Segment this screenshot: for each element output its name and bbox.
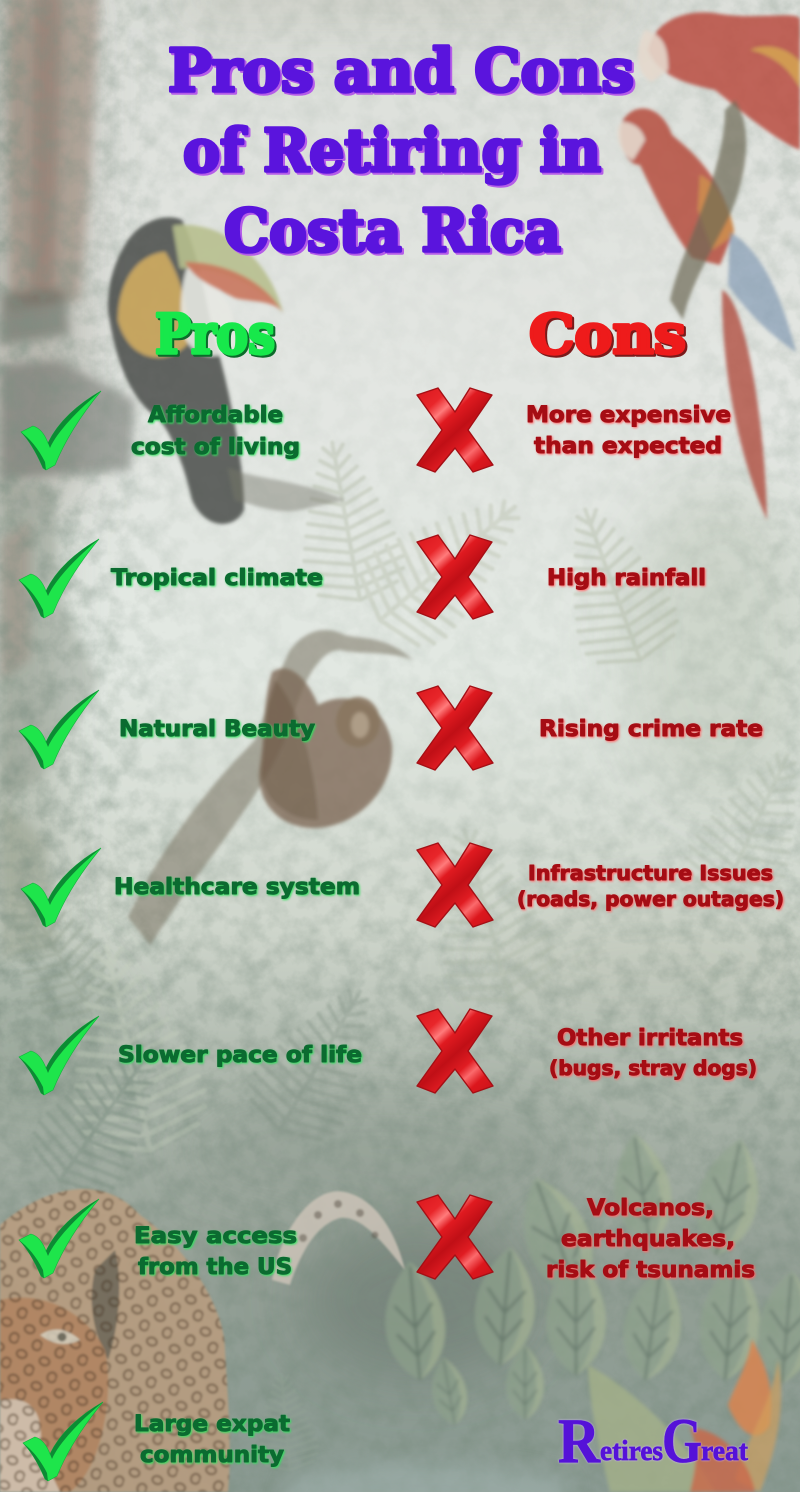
pro: natural beauty: Natural Beauty	[119, 717, 315, 742]
con: other irritants: (bugs, stray dogs)	[549, 1056, 757, 1080]
con: infrastructure issues	[517, 861, 784, 911]
con: infrastructure issues: Infrastructure Issues	[528, 861, 773, 885]
con: other irritants: Other irritants	[557, 1026, 743, 1051]
title: Pros and Cons	[168, 36, 634, 105]
background detail: jaguar	[0, 1189, 405, 1492]
logo: RetiresGreat: etires	[600, 1436, 663, 1467]
pro: large expat community	[134, 1412, 291, 1468]
con: rising crime rate: Rising crime rate	[539, 717, 763, 742]
icon: check 5	[19, 1016, 99, 1095]
pro: affordable cost of living: Affordable	[148, 403, 283, 428]
con: infrastructure issues: (roads, power outages)	[517, 887, 784, 911]
title	[168, 36, 634, 265]
pro: healthcare system: Healthcare system	[114, 875, 360, 900]
icon: cross 6	[417, 1195, 493, 1279]
icon: cross 2	[417, 535, 493, 619]
background detail: pool of water	[280, 1463, 570, 1492]
con: more expensive than expected: than expected	[534, 434, 722, 459]
con: volcanos, earthquakes, risk of tsunamis	[546, 1196, 755, 1283]
pro: tropical climate: Tropical climate	[111, 566, 323, 591]
pros list	[19, 391, 362, 1481]
icon: check 3	[19, 690, 99, 769]
cons list	[417, 388, 784, 1283]
background detail: jungle leaves lower right	[380, 1130, 800, 1428]
pro: easy access from the US: from the US	[138, 1255, 292, 1280]
title: Costa Rica	[224, 196, 561, 265]
icon: check 2	[19, 539, 99, 618]
icon: check 7	[23, 1402, 103, 1481]
con: more expensive than expected	[526, 403, 731, 459]
logo: RetiresGreat: R	[558, 1406, 601, 1476]
logo: RetiresGreat: reat	[701, 1436, 749, 1467]
icon: cross 1	[417, 388, 493, 472]
logo: RetiresGreat	[558, 1406, 749, 1476]
heading: Cons: Cons	[529, 302, 686, 366]
pro: slower pace of life: Slower pace of life	[118, 1043, 362, 1068]
title: of Retiring in	[183, 116, 601, 185]
pro: affordable cost of living	[131, 403, 300, 460]
con: volcanos, earthquakes, risk of tsunamis: risk of tsunamis	[546, 1258, 755, 1283]
pro: large expat community: Large expat	[134, 1412, 291, 1437]
icon: cross 5	[417, 1009, 493, 1093]
icon: check 1	[21, 391, 101, 470]
con: volcanos, earthquakes, risk of tsunamis: earthquakes,	[561, 1227, 735, 1252]
icon: cross 4	[417, 843, 493, 927]
con: high rainfall: High rainfall	[547, 566, 706, 591]
background detail: sloth and branch	[128, 630, 413, 945]
icon: cross 3	[417, 686, 493, 770]
heading: Pros: Pros	[155, 302, 275, 366]
background detail: heliconia flower and leaf	[588, 1339, 781, 1492]
background detail: scarlet macaws	[618, 12, 800, 520]
pro: easy access from the US	[134, 1224, 297, 1280]
pro: easy access from the US: Easy access	[134, 1224, 297, 1249]
icon: check 4	[21, 848, 101, 927]
con: more expensive than expected: More expensive	[526, 403, 731, 428]
background detail: ferns	[0, 434, 800, 1473]
background detail: tree trunk and dark foliage	[0, 0, 135, 960]
con: volcanos, earthquakes, risk of tsunamis: Volcanos,	[587, 1196, 714, 1221]
icon: check 6	[19, 1199, 99, 1278]
pro: large expat community: community	[140, 1443, 284, 1468]
pro: affordable cost of living: cost of living	[131, 435, 300, 460]
background detail: toucan	[108, 217, 345, 524]
con: other irritants	[549, 1026, 757, 1080]
logo: RetiresGreat: G	[662, 1406, 702, 1476]
